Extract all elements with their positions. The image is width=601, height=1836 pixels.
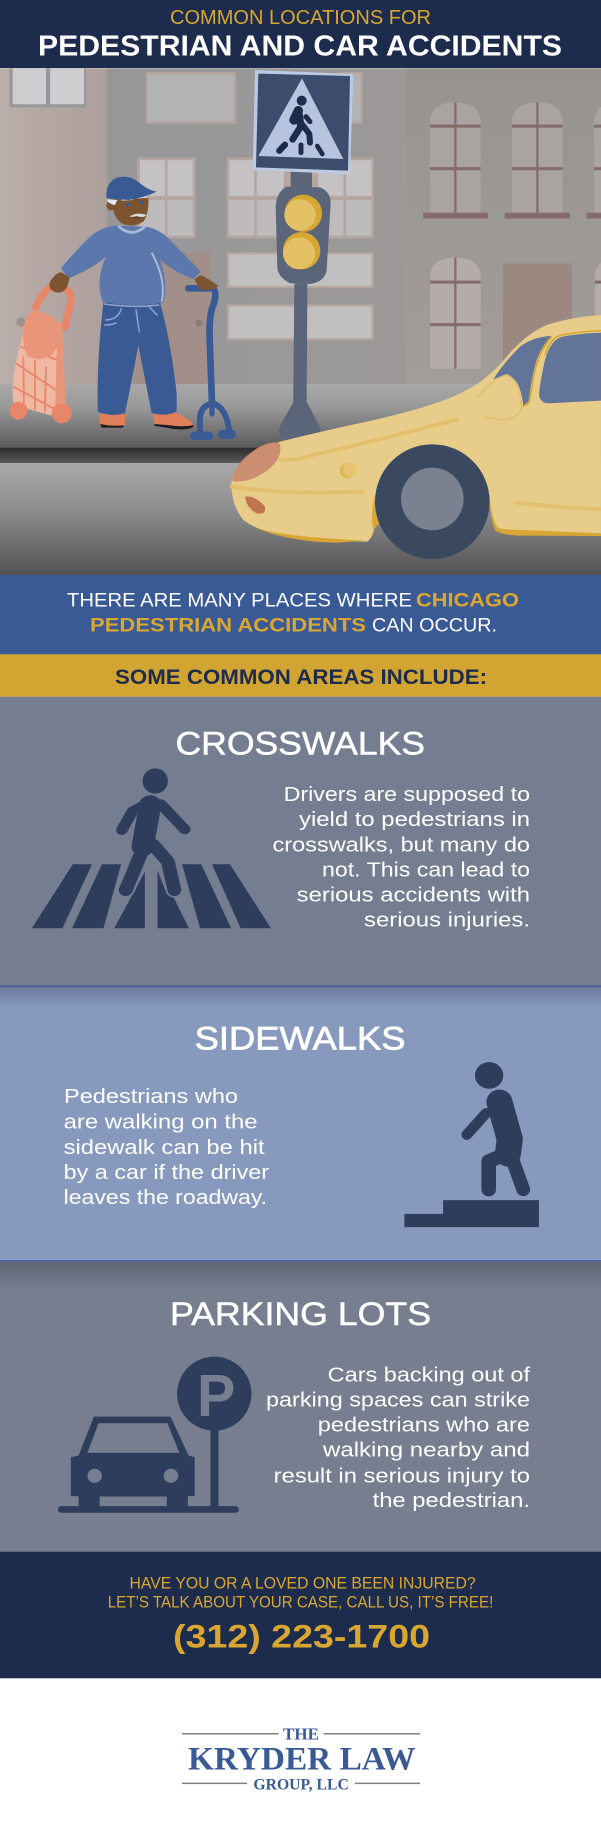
subheading: SOME COMMON AREAS INCLUDE: [115,666,487,689]
crosswalks description: Drivers are supposed to [284,783,530,806]
hero illustration: street scene [0,68,601,576]
crosswalks description: yield to pedestrians in [299,808,530,831]
crosswalks description: serious accidents with [297,884,530,907]
yellow car [231,315,601,559]
sidewalks description: are walking on the [64,1110,258,1133]
sidewalks heading: SIDEWALKS [195,1020,406,1056]
sidewalks description: sidewalk can be hit [64,1136,265,1159]
header kicker: COMMON LOCATIONS FOR [170,7,431,29]
intro text: PEDESTRIAN ACCIDENTS [90,615,366,637]
panel: crosswalks [0,697,601,987]
phone number: (312) 223-1700 [173,1618,430,1654]
gold subheading band [0,654,601,697]
header banner [0,0,601,68]
logo: The Kryder Law Group, LLC [182,1724,420,1793]
parking lots description: pedestrians who are [318,1413,530,1436]
logo: The Kryder Law Group, LLC: THE [283,1724,319,1743]
logo: The Kryder Law Group, LLC: GROUP, LLC [253,1776,349,1793]
call to action footer [0,1552,601,1678]
sidewalks description: Pedestrians who [64,1085,238,1108]
parking lots description: result in serious injury to [274,1464,530,1487]
shopping cart [9,287,72,423]
icon: car and parking sign: P [197,1362,235,1429]
parking lots heading: PARKING LOTS [170,1296,431,1332]
intro band [0,575,601,655]
main title: PEDESTRIAN AND CAR ACCIDENTS [38,30,562,62]
icon: car and parking sign [58,1357,251,1513]
crosswalks description: not. This can lead to [322,859,530,882]
crosswalks description: serious injuries. [364,909,530,932]
intro text: CHICAGO [416,590,519,612]
door knob [16,317,26,327]
icon: pedestrian on crosswalk [32,768,271,928]
sidewalks description: leaves the roadway. [64,1186,267,1209]
icon: pedestrian stepping on curb [404,1062,539,1227]
intro text: CAN OCCUR. [372,615,497,637]
crosswalks description: crosswalks, but many do [272,834,530,857]
call to action text: LET’S TALK ABOUT YOUR CASE, CALL US, IT’S FREE! [108,1594,493,1612]
parking lots description: Cars backing out of [328,1363,530,1386]
logo: The Kryder Law Group, LLC: KRYDER LAW [188,1741,416,1777]
call to action text: HAVE YOU OR A LOVED ONE BEEN INJURED? [130,1575,476,1593]
intro text: THERE ARE MANY PLACES WHERE [67,590,412,612]
elderly pedestrian with cap and cane [49,177,236,440]
parking lots description: the pedestrian. [373,1489,530,1512]
traffic light and crossing sign [253,70,353,440]
parking lots description: parking spaces can strike [266,1389,530,1412]
arched windows [423,102,601,369]
parking lots description: walking nearby and [322,1438,530,1462]
sidewalks description: by a car if the driver [64,1161,269,1184]
crosswalks heading: CROSSWALKS [176,725,425,761]
panel: parking lots [0,1260,601,1552]
panel: sidewalks [0,985,601,1261]
